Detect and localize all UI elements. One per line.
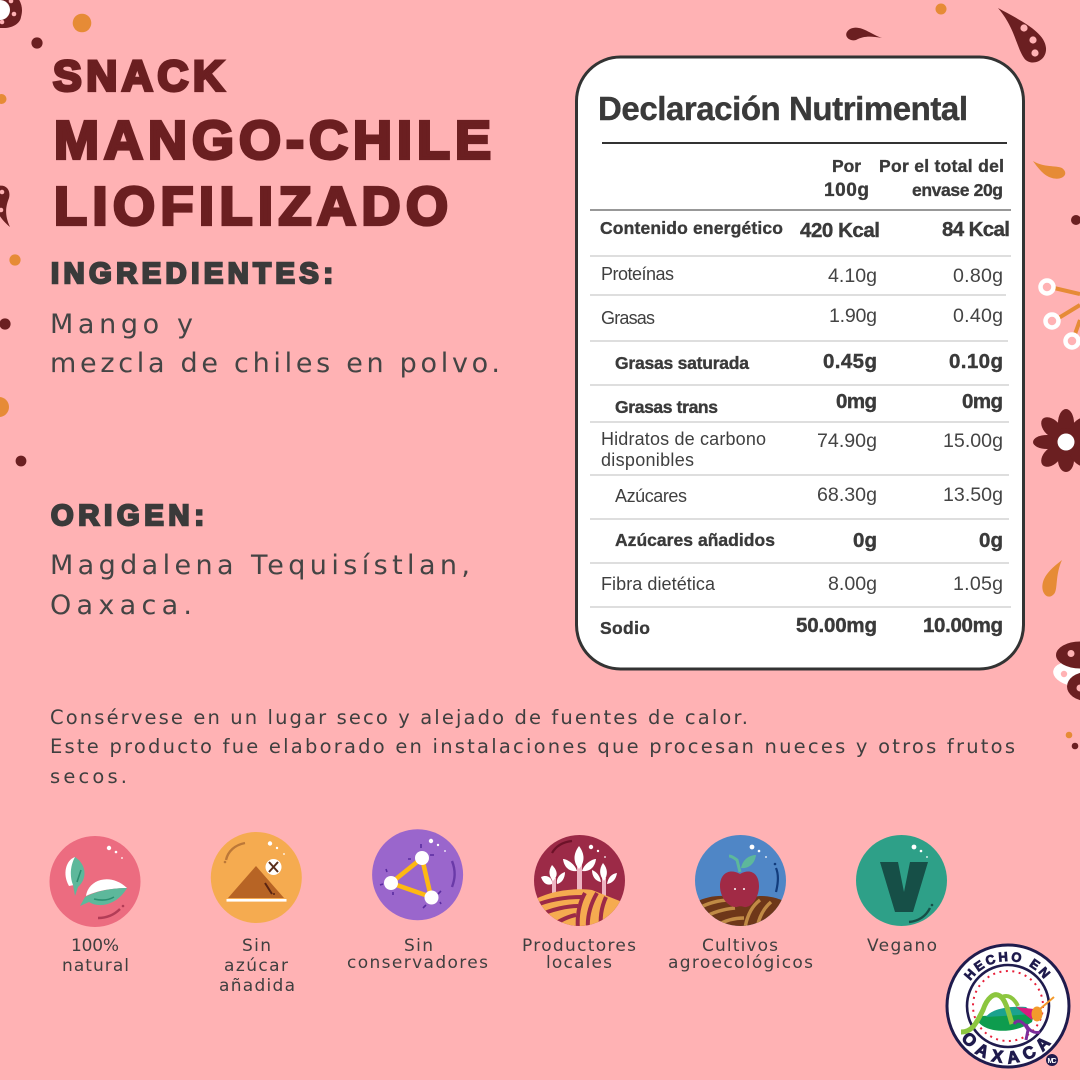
row: fibra dietética bbox=[601, 573, 1003, 595]
text block: conservation note: secos. bbox=[50, 765, 127, 788]
table column headers: Por bbox=[832, 156, 861, 176]
table column headers bbox=[824, 156, 1004, 201]
row: grasas: Grasas bbox=[601, 308, 655, 328]
text block: conservation note: Este producto fue elaborado en instalaciones que procesan nueces y otros frutos bbox=[50, 735, 1015, 758]
label: 100% natural: 100% bbox=[71, 936, 119, 956]
decoration: top-right dots and drops bbox=[846, 4, 1080, 225]
logo grasshopper bbox=[961, 995, 1054, 1040]
decoration: right orange drop bbox=[1042, 560, 1062, 597]
row: hidratos de carbono: Hidratos de carbono bbox=[601, 429, 766, 449]
logo lettering: HECHO EN bbox=[964, 952, 1051, 981]
label: sin conservadores bbox=[347, 936, 488, 973]
text block: ingredientes bbox=[50, 309, 500, 379]
row: hidratos de carbono: disponibles bbox=[601, 450, 694, 470]
label: sin azúcar añadida: añadida bbox=[219, 976, 295, 996]
row: contenido energético bbox=[600, 218, 1010, 242]
row: grasas saturada: 0.10g bbox=[949, 350, 1003, 373]
row: contenido energético: 420 Kcal bbox=[800, 219, 880, 242]
icon: vegano bbox=[856, 835, 947, 926]
label: vegano: Vegano bbox=[867, 936, 937, 956]
title: SNACK bbox=[53, 52, 224, 100]
logo trademark mark: MC bbox=[1048, 1058, 1056, 1065]
row: azúcares: 68.30g bbox=[817, 484, 877, 506]
row: azúcares añadidos bbox=[615, 529, 1003, 552]
row: grasas saturada: 0.45g bbox=[823, 350, 877, 373]
row: fibra dietética: Fibra dietética bbox=[601, 574, 716, 594]
table column headers: 100g bbox=[824, 180, 869, 201]
row: grasas trans bbox=[615, 390, 1003, 417]
text block: origen bbox=[50, 550, 470, 621]
row: azúcares añadidos: 0g bbox=[979, 529, 1003, 552]
decoration: left dots and drop bbox=[0, 14, 91, 466]
text block: origen: Oaxaca. bbox=[50, 590, 192, 621]
row: contenido energético: Contenido energético bbox=[600, 218, 783, 238]
row: grasas: 1.90g bbox=[829, 305, 877, 327]
row: proteínas: Proteínas bbox=[601, 264, 674, 284]
label: sin azúcar añadida: Sin bbox=[242, 936, 271, 956]
title: MANGO-CHILE bbox=[54, 110, 491, 170]
panel: declaración nutrimental bbox=[576, 57, 1024, 669]
table column headers: Por el total del bbox=[879, 156, 1004, 176]
icon: cultivos agroecológicos bbox=[695, 835, 786, 926]
text block: conservation note bbox=[50, 706, 1015, 788]
row: proteínas: 4.10g bbox=[828, 265, 877, 287]
icon: 100% natural bbox=[50, 836, 140, 927]
row: contenido energético: 84 Kcal bbox=[942, 218, 1010, 241]
row: sodio bbox=[600, 614, 1003, 638]
row: sodio: Sodio bbox=[600, 618, 650, 638]
row: hidratos de carbono bbox=[601, 429, 1003, 470]
label: sin conservadores: Sin bbox=[404, 936, 433, 956]
row: grasas saturada: Grasas saturada bbox=[615, 353, 749, 373]
row: fibra dietética: 8.00g bbox=[828, 573, 877, 595]
row: azúcares: Azúcares bbox=[615, 486, 687, 506]
row: azúcares bbox=[615, 484, 1003, 506]
row: azúcares añadidos: 0g bbox=[853, 529, 877, 552]
row: sodio: 50.00mg bbox=[796, 614, 877, 637]
label: sin azúcar añadida bbox=[219, 936, 295, 996]
row: grasas trans: 0mg bbox=[962, 390, 1003, 413]
title: LIOFILIZADO bbox=[54, 176, 448, 236]
icon: sin conservadores bbox=[372, 829, 463, 920]
row: sodio: 10.00mg bbox=[923, 614, 1003, 637]
row: azúcares: 13.50g bbox=[943, 484, 1003, 506]
row: proteínas bbox=[601, 264, 1003, 287]
decoration: bottom-right blobs bbox=[1051, 642, 1080, 749]
text block: ingredientes: Mango y bbox=[50, 309, 193, 340]
icon: productores locales bbox=[534, 835, 625, 926]
decoration: top-left flower bbox=[0, 0, 22, 28]
logo lettering: OAXACA bbox=[962, 1032, 1052, 1064]
row: grasas saturada bbox=[615, 350, 1003, 373]
label: sin conservadores: conservadores bbox=[347, 953, 488, 973]
text block: origen: Magdalena Tequisístlan, bbox=[50, 550, 470, 581]
heading: origen: ORIGEN: bbox=[51, 500, 204, 532]
row: grasas trans: Grasas trans bbox=[615, 397, 718, 417]
decoration: orange stamen bbox=[1040, 280, 1080, 348]
heading: ingredientes: INGREDIENTES: bbox=[51, 258, 333, 290]
label: productores locales: Productores bbox=[522, 936, 636, 956]
title bbox=[53, 52, 491, 236]
logo: hecho en Oaxaca bbox=[946, 944, 1070, 1068]
row: grasas trans: 0mg bbox=[836, 390, 877, 413]
row: proteínas: 0.80g bbox=[953, 265, 1003, 287]
label: 100% natural bbox=[62, 936, 129, 976]
row: fibra dietética: 1.05g bbox=[953, 573, 1003, 595]
table column headers: envase 20g bbox=[912, 180, 1003, 200]
text block: ingredientes: mezcla de chiles en polvo. bbox=[50, 348, 500, 379]
logo lettering bbox=[962, 952, 1052, 1064]
label: 100% natural: natural bbox=[62, 956, 129, 976]
row: azúcares añadidos: Azúcares añadidos bbox=[615, 530, 775, 550]
label: cultivos agroecológicos: Cultivos bbox=[702, 936, 778, 956]
label: sin azúcar añadida: azúcar bbox=[224, 956, 288, 976]
row: grasas bbox=[601, 305, 1003, 328]
text block: conservation note: Consérvese en un lugar seco y alejado de fuentes de calor. bbox=[50, 706, 748, 729]
table heading: Declaración Nutrimental bbox=[598, 90, 968, 127]
label: productores locales: locales bbox=[546, 953, 612, 973]
row: grasas: 0.40g bbox=[953, 305, 1003, 327]
label: cultivos agroecológicos: agroecológicos bbox=[668, 953, 813, 973]
decoration: flower bbox=[1033, 409, 1080, 472]
label: productores locales bbox=[522, 936, 636, 973]
icon: sin azúcar añadida bbox=[211, 832, 302, 923]
row: hidratos de carbono: 15.00g bbox=[943, 430, 1003, 452]
row: hidratos de carbono: 74.90g bbox=[817, 430, 877, 452]
label: cultivos agroecológicos bbox=[668, 936, 813, 973]
